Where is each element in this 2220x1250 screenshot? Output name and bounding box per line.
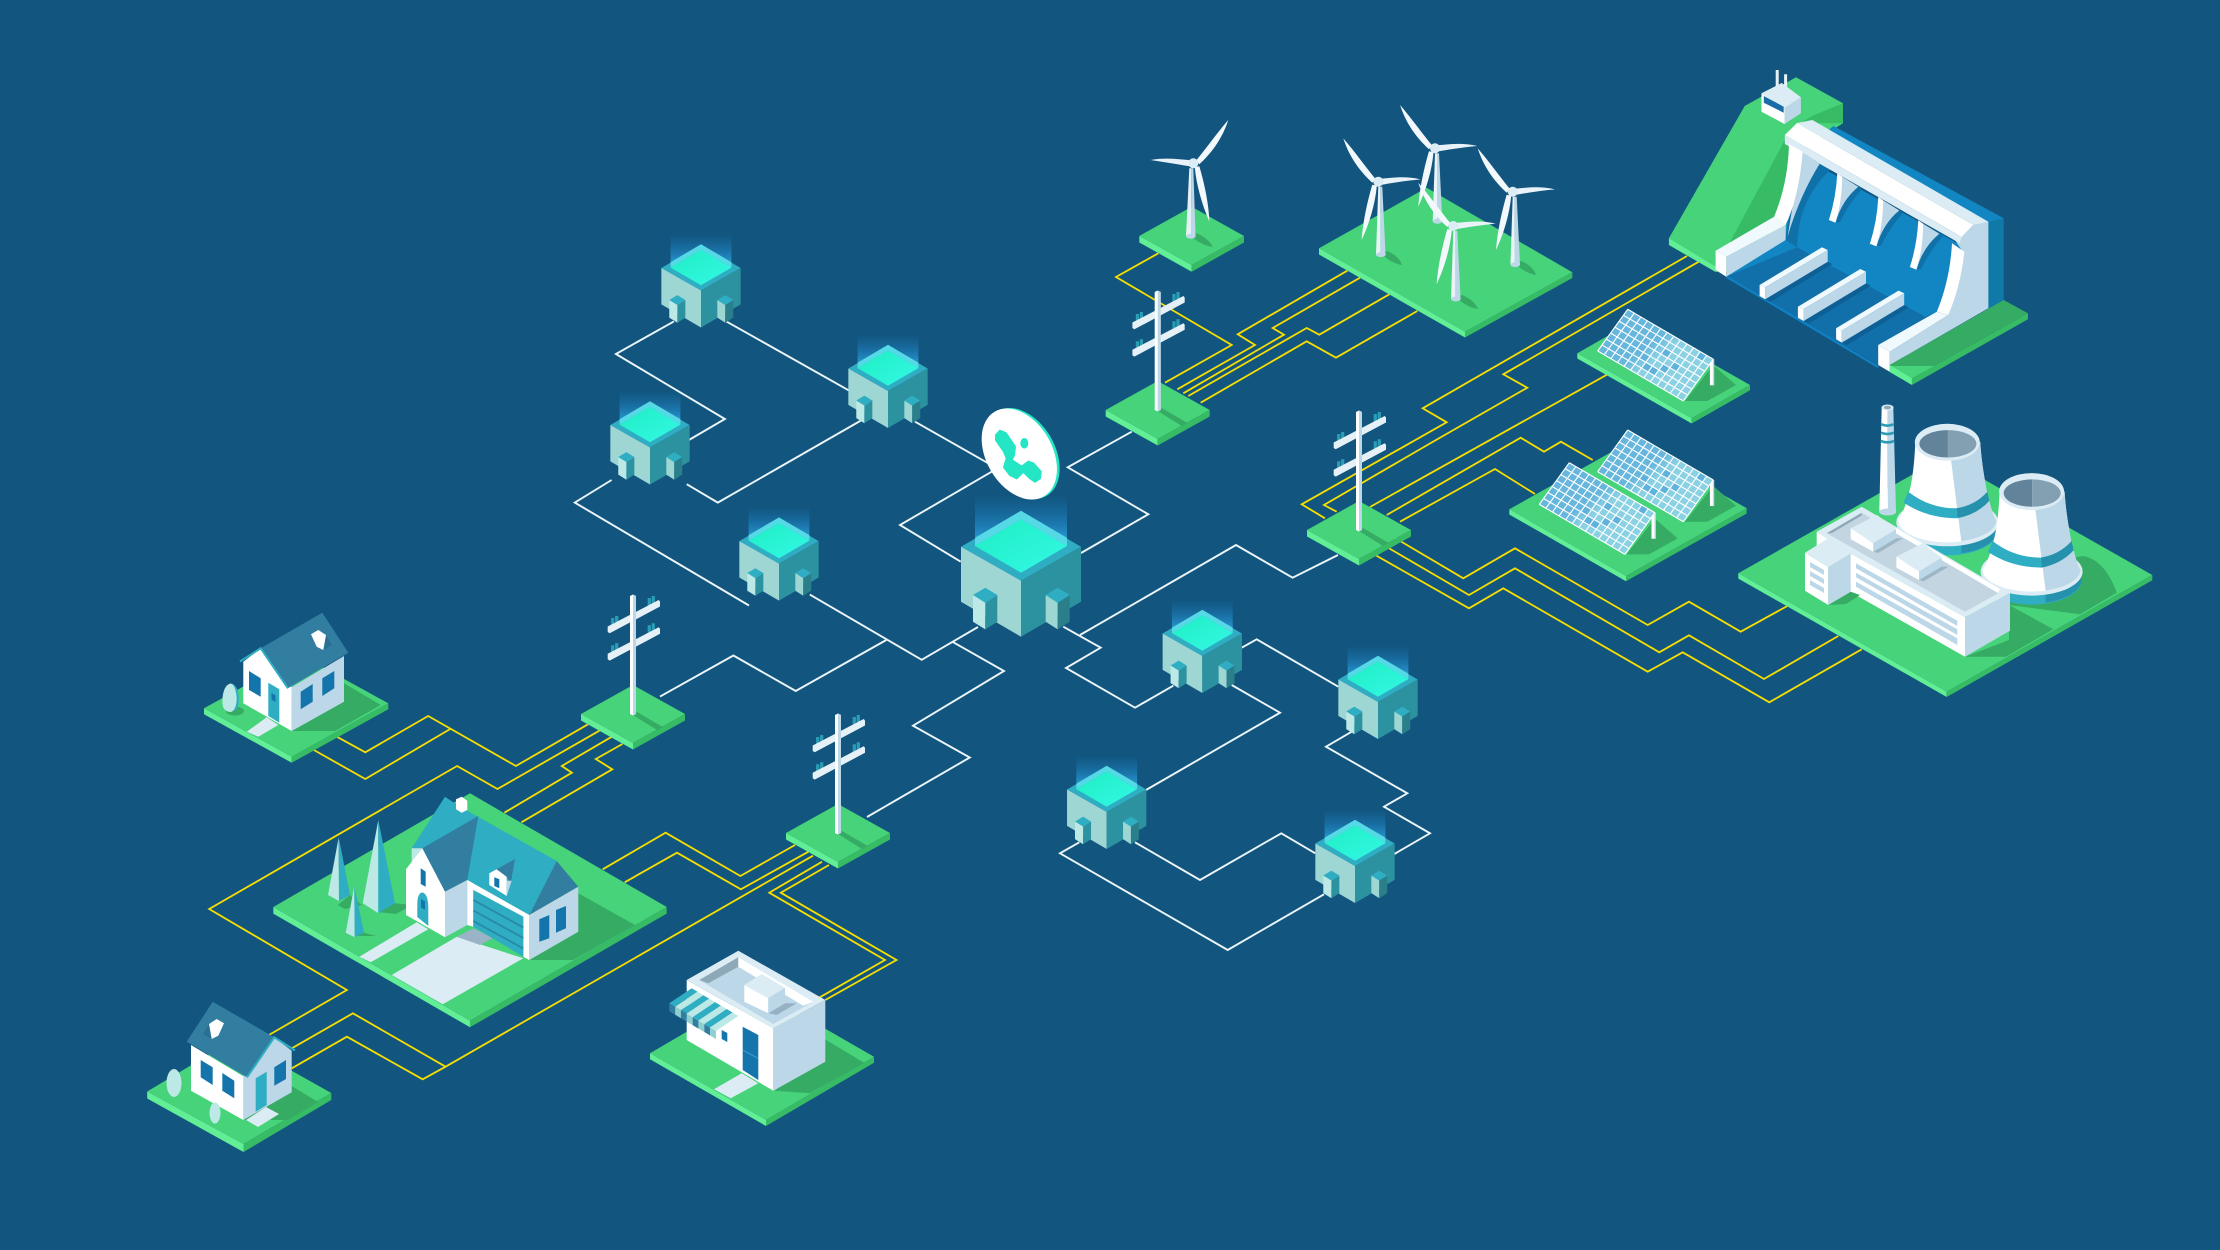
data center: small node 6: [1338, 646, 1418, 739]
cooling tower front: [1981, 473, 2083, 605]
trees: [328, 820, 412, 937]
house lower left: [147, 1002, 331, 1152]
data center: small node 8: [1315, 810, 1395, 903]
chimney: [1879, 404, 1896, 516]
data center: small node 2: [848, 335, 928, 428]
control house on dam: [1762, 70, 1801, 124]
factory building: [1805, 507, 2010, 657]
corner shop: [650, 951, 874, 1126]
utility pole 1: [581, 594, 685, 750]
data center: small node 7: [1067, 756, 1146, 849]
bush left: [166, 1069, 182, 1097]
solar farm: single array: [1577, 309, 1750, 424]
utility pole 3: [1106, 290, 1210, 446]
power plant: [1738, 404, 2152, 697]
single wind turbine: [1139, 120, 1244, 272]
cooling tower back: [1896, 424, 1998, 555]
large house with garage: [273, 793, 667, 1027]
white data network lines: [575, 321, 1430, 950]
data center: small node 4: [739, 507, 819, 601]
hydroelectric dam: [1669, 70, 2028, 385]
striped awning: [669, 988, 738, 1039]
utility pole 2: [786, 714, 890, 868]
wind farm: [1319, 105, 1572, 338]
house upper left: [204, 613, 388, 763]
icon: hub logo badge: [966, 395, 1075, 513]
solar farm: double array: [1509, 430, 1747, 581]
shop window: [722, 1030, 727, 1042]
data center: small node 3: [610, 391, 690, 485]
yellow power lines: [209, 253, 1862, 1079]
utility pole 4: [1307, 410, 1411, 566]
data center: small node 5: [1163, 600, 1242, 693]
data center: main hub: [961, 496, 1081, 637]
data center: small node 1: [661, 234, 741, 328]
bush front: [210, 1102, 220, 1124]
